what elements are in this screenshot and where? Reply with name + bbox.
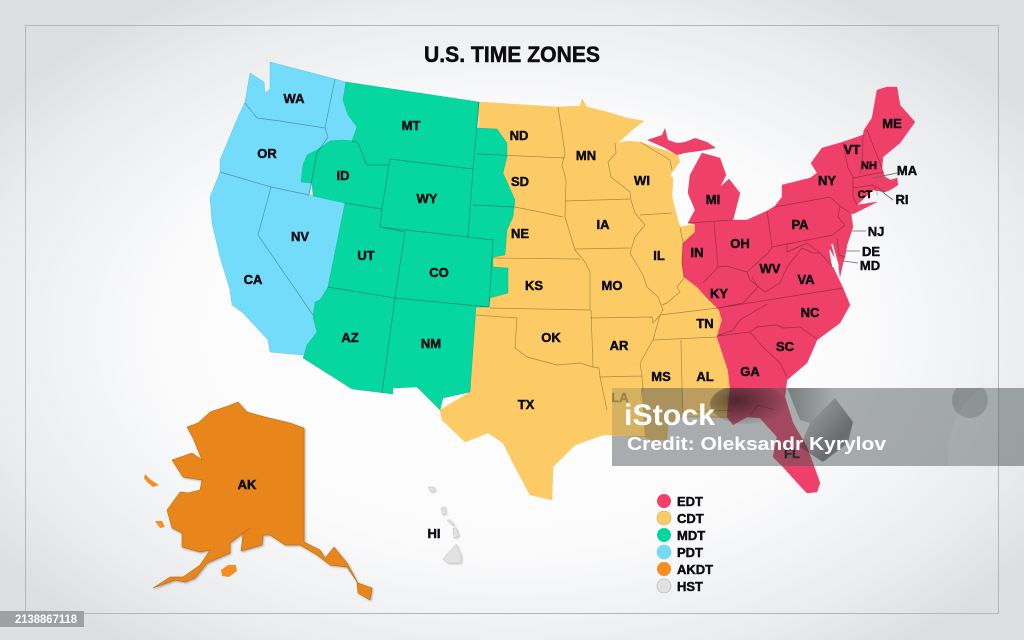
state labels: NJ (868, 224, 884, 239)
state labels: MO (602, 278, 622, 293)
state labels: WV (760, 261, 781, 276)
leader lines for small northeastern states (843, 173, 897, 263)
state labels: MN (576, 148, 596, 163)
watermark: credit line: Credit: Oleksandr Kyrylov (627, 434, 886, 454)
zone: Eastern Daylight Time (682, 87, 915, 493)
Alaska islands (144, 474, 237, 577)
state labels: ND (510, 128, 528, 143)
image id tag (0, 611, 84, 627)
state labels: MD (860, 258, 880, 273)
zone: Mountain Daylight Time (301, 82, 515, 410)
state labels: NM (421, 336, 441, 351)
state labels: ID (336, 168, 350, 183)
state labels: SD (511, 174, 529, 189)
state labels: AK (238, 477, 257, 492)
state labels: IA (596, 217, 610, 232)
state labels: WI (634, 173, 650, 188)
state labels: CO (429, 265, 449, 280)
state labels: NC (801, 305, 820, 320)
state labels: MA (897, 163, 918, 178)
state labels: CT (858, 189, 873, 201)
legend item: CDT: CDT (677, 511, 704, 526)
state labels: KS (525, 278, 543, 293)
state labels: NE (511, 226, 529, 241)
state labels: NY (818, 173, 836, 188)
state labels: MS (651, 369, 671, 384)
state labels: GA (740, 364, 760, 379)
state labels: IN (690, 245, 704, 260)
zone: Pacific Daylight Time (210, 62, 357, 355)
legend item: EDT: EDT (677, 494, 703, 509)
state labels: KY (710, 286, 728, 301)
state labels: MI (706, 192, 720, 207)
state labels: WY (417, 191, 438, 206)
state labels: LA (611, 390, 629, 405)
state labels: VT (844, 142, 860, 157)
state labels: MT (402, 118, 420, 133)
watermark band (612, 388, 1024, 466)
image id tag: 2138867118 (15, 614, 78, 626)
state labels: AR (610, 338, 629, 353)
state labels: VA (797, 272, 815, 287)
state labels: IL (653, 248, 665, 263)
legend item: HST: HST (677, 579, 703, 594)
state labels: SC (776, 339, 795, 354)
legend item: AKDT: AKDT (677, 562, 713, 577)
legend item: MDT: MDT (677, 528, 705, 543)
state labels: PA (791, 217, 809, 232)
title: U.S. TIME ZONES (424, 42, 600, 67)
zone: Central Daylight Time (440, 99, 733, 500)
map: contiguous United States by time zone (210, 62, 915, 500)
state labels: WA (284, 91, 305, 106)
state borders (220, 79, 885, 415)
legend item: PDT: PDT (677, 545, 703, 560)
lake cut: Green Bay and Chesapeake Bay (671, 163, 838, 267)
state labels: NH (861, 160, 877, 172)
state labels: OK (541, 330, 561, 345)
state labels: AL (696, 369, 714, 384)
state labels: RI (896, 192, 908, 207)
state labels: AZ (341, 330, 359, 345)
map: Hawaii (428, 487, 461, 563)
Alaska mainland (153, 402, 372, 600)
legend (657, 494, 713, 594)
state labels: FL (784, 446, 800, 461)
state labels (238, 91, 918, 541)
map: Alaska (144, 402, 372, 600)
state labels: OR (257, 146, 277, 161)
state labels: TX (518, 397, 535, 412)
state labels: NV (291, 229, 309, 244)
state labels: ME (882, 116, 902, 131)
state labels: TN (696, 316, 714, 331)
zone: Eastern Daylight Time, upper Michigan (647, 128, 716, 155)
watermark: iStock: iStock (624, 399, 715, 432)
state labels: UT (357, 248, 375, 263)
state labels: HI (428, 526, 440, 541)
state labels: OH (730, 236, 750, 251)
state labels: CA (244, 272, 263, 287)
state labels: DE (862, 244, 880, 259)
